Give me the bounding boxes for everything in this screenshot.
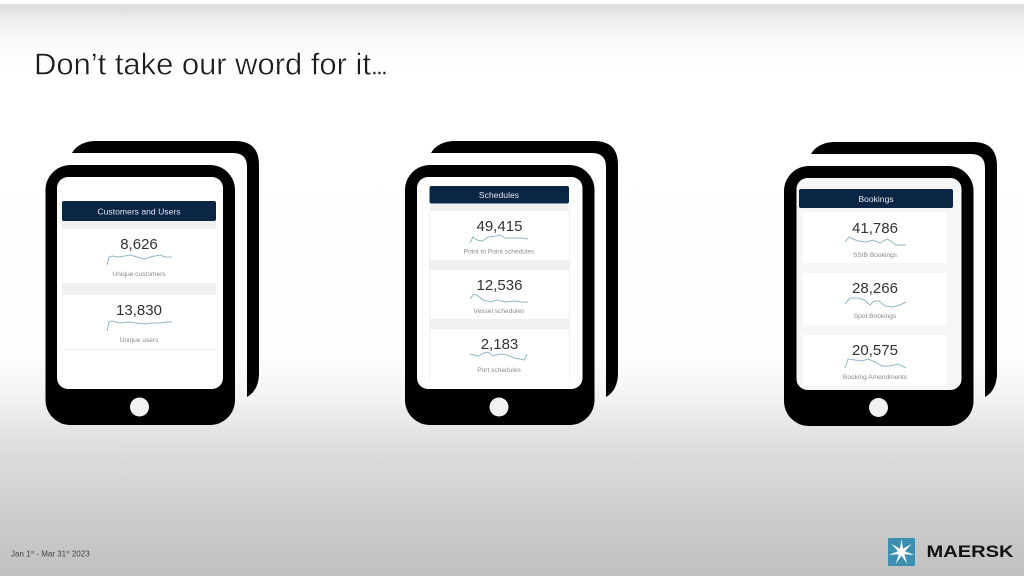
metric: unique users: Unique users	[120, 337, 159, 344]
icon: front tablet	[405, 165, 594, 425]
dashboard header: Bookings	[858, 194, 894, 204]
metric: point to point schedules: 49,415	[477, 218, 522, 235]
panel: customers and users tablet	[46, 141, 259, 425]
icon: front tablet	[784, 166, 974, 426]
dashboard header	[62, 201, 216, 221]
metric: point to point schedules	[464, 218, 535, 256]
icon: back tablet	[811, 142, 997, 397]
date range footnote: st	[31, 550, 35, 554]
metric: port schedules: Port schedules	[477, 367, 522, 374]
metric: booking amendments: Booking Amendments	[843, 374, 908, 381]
title: ...	[370, 50, 386, 80]
metric: port schedules	[470, 336, 527, 374]
metric: ssib bookings	[803, 212, 947, 263]
metric: vessel schedules: Vessel schedules	[474, 308, 525, 315]
date range footnote: st	[66, 550, 70, 554]
grey separators	[429, 204, 570, 380]
wordmark: MAERSK	[926, 542, 1014, 561]
card bottom edge	[62, 349, 216, 350]
metric: booking amendments	[803, 335, 947, 386]
logo: Maersk	[888, 538, 1014, 566]
icon: front tablet	[46, 165, 235, 425]
panel: bookings tablet	[784, 142, 997, 426]
metric: unique customers: 8,626	[120, 236, 158, 253]
date range footnote: 2023	[70, 550, 90, 558]
grey separators	[62, 221, 216, 295]
metric: vessel schedules: 12,536	[477, 277, 522, 294]
metric: ssib bookings: 41,786	[852, 220, 898, 237]
metric: unique customers: Unique customers	[112, 271, 166, 278]
metric: booking amendments: 20,575	[852, 342, 898, 359]
date range footnote: - Mar 31	[34, 550, 67, 558]
date range footnote: Jan 1	[11, 550, 31, 558]
icon: home button	[130, 398, 149, 416]
panel: schedules tablet	[405, 141, 618, 425]
tablet screen	[796, 178, 962, 390]
title: Don’t take our word for it	[34, 46, 371, 82]
metric: spot bookings	[803, 273, 947, 325]
icon: back tablet	[431, 141, 618, 397]
dashboard header: Schedules	[479, 190, 519, 200]
icon: back tablet	[72, 141, 259, 397]
metric: ssib bookings: SSIB Bookings	[853, 252, 898, 259]
metric: unique users	[107, 302, 172, 344]
icon: seven-pointed star	[888, 538, 915, 566]
metric: unique users: 13,830	[116, 302, 162, 319]
tablet screen	[417, 177, 582, 389]
metric: spot bookings: 28,266	[852, 280, 898, 297]
tablet screen	[57, 177, 223, 389]
dashboard header	[430, 186, 569, 204]
dashboard header: Customers and Users	[97, 206, 181, 216]
icon: home button	[490, 398, 508, 416]
icon: home button	[869, 398, 888, 417]
metric: port schedules: 2,183	[481, 336, 518, 353]
metric: unique customers	[107, 236, 172, 278]
dashboard header	[799, 189, 953, 208]
metric: spot bookings: Spot Bookings	[854, 313, 897, 320]
metric: point to point schedules: Point to Point schedules	[464, 248, 535, 256]
metric: vessel schedules	[470, 277, 528, 315]
